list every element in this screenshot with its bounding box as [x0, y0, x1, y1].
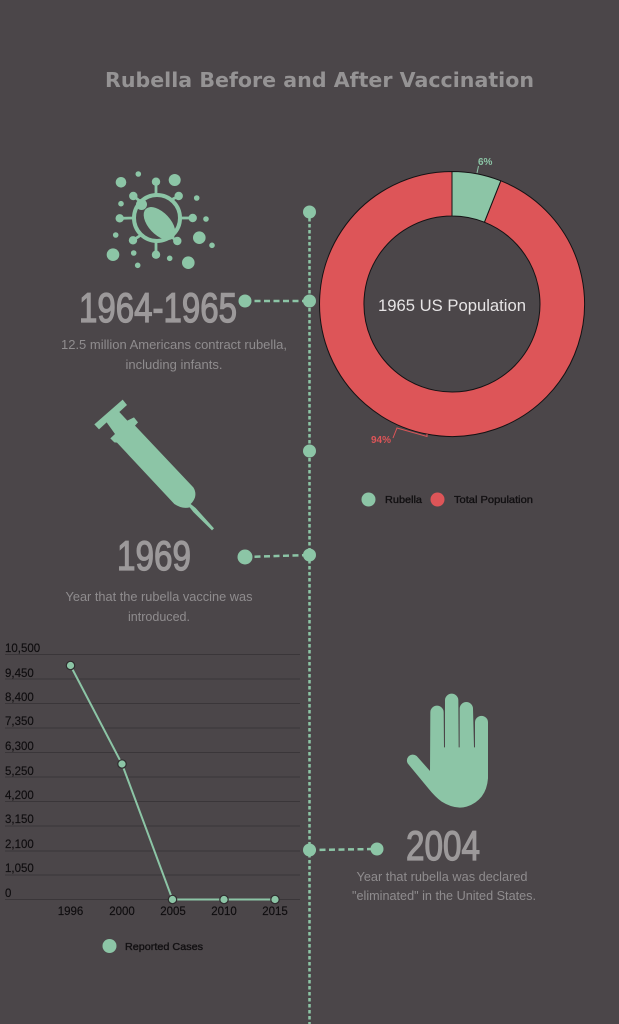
y axis labels: 7,350	[5, 716, 34, 728]
legend: reported cases	[102, 939, 203, 953]
data line	[70, 666, 275, 900]
label: 94%	[371, 428, 427, 446]
text: 12.5 million: 12.5 million Americans contract rubella,	[61, 338, 287, 352]
legend: donut: Rubella	[385, 494, 422, 506]
text: eliminated: Year that rubella was declared	[356, 870, 528, 884]
x axis labels	[58, 906, 288, 918]
y axis labels: 4,200	[5, 790, 34, 802]
label: 6%: 6%	[478, 157, 493, 168]
legend: reported cases: Reported Cases	[125, 941, 203, 953]
y axis labels: 1,050	[5, 863, 34, 875]
legend: donut: Total Population	[454, 494, 533, 506]
heading: 1964-1965: 1964-1965	[79, 284, 237, 331]
y axis labels: 9,450	[5, 668, 34, 680]
y axis labels: 6,300	[5, 741, 34, 753]
x axis labels: 2000	[109, 906, 135, 918]
label: 6%	[477, 157, 493, 173]
y axis labels: 2,100	[5, 839, 34, 851]
icon: syringe	[94, 400, 214, 530]
chart: donut	[320, 172, 585, 436]
title: Rubella Before and After Vaccination	[105, 68, 534, 92]
x axis labels: 1996	[58, 906, 83, 918]
slice: total population	[320, 172, 585, 436]
icon: hand	[407, 694, 488, 808]
slice: rubella	[452, 172, 501, 222]
text: vaccine introduced: introduced.	[128, 610, 190, 624]
x axis labels: 2010	[211, 906, 237, 918]
text: eliminated	[352, 870, 536, 903]
data points	[66, 661, 279, 904]
donut centre label: 1965 US Population	[378, 297, 526, 315]
y axis labels: 10,500	[5, 643, 40, 655]
text: 12.5 million: including infants.	[126, 358, 222, 372]
text: vaccine introduced: Year that the rubella vaccine was	[66, 590, 253, 604]
y axis labels: 8,400	[5, 692, 34, 704]
y axis labels	[5, 643, 40, 900]
text: vaccine introduced	[66, 590, 253, 624]
y axis labels: 5,250	[5, 766, 34, 778]
label: 94%: 94%	[371, 435, 391, 446]
x axis labels: 2005	[160, 906, 186, 918]
chart: reported cases line chart	[5, 643, 300, 918]
y axis labels: 0	[5, 888, 11, 900]
legend: donut	[362, 492, 533, 506]
text: 12.5 million	[61, 338, 287, 372]
heading: 1969: 1969	[117, 532, 191, 579]
heading: 2004: 2004	[406, 822, 480, 869]
timeline	[238, 206, 384, 1024]
icon: virus	[107, 171, 215, 269]
x axis labels: 2015	[262, 906, 288, 918]
text: eliminated: "eliminated" in the United States.	[352, 889, 536, 903]
y axis labels: 3,150	[5, 814, 34, 826]
